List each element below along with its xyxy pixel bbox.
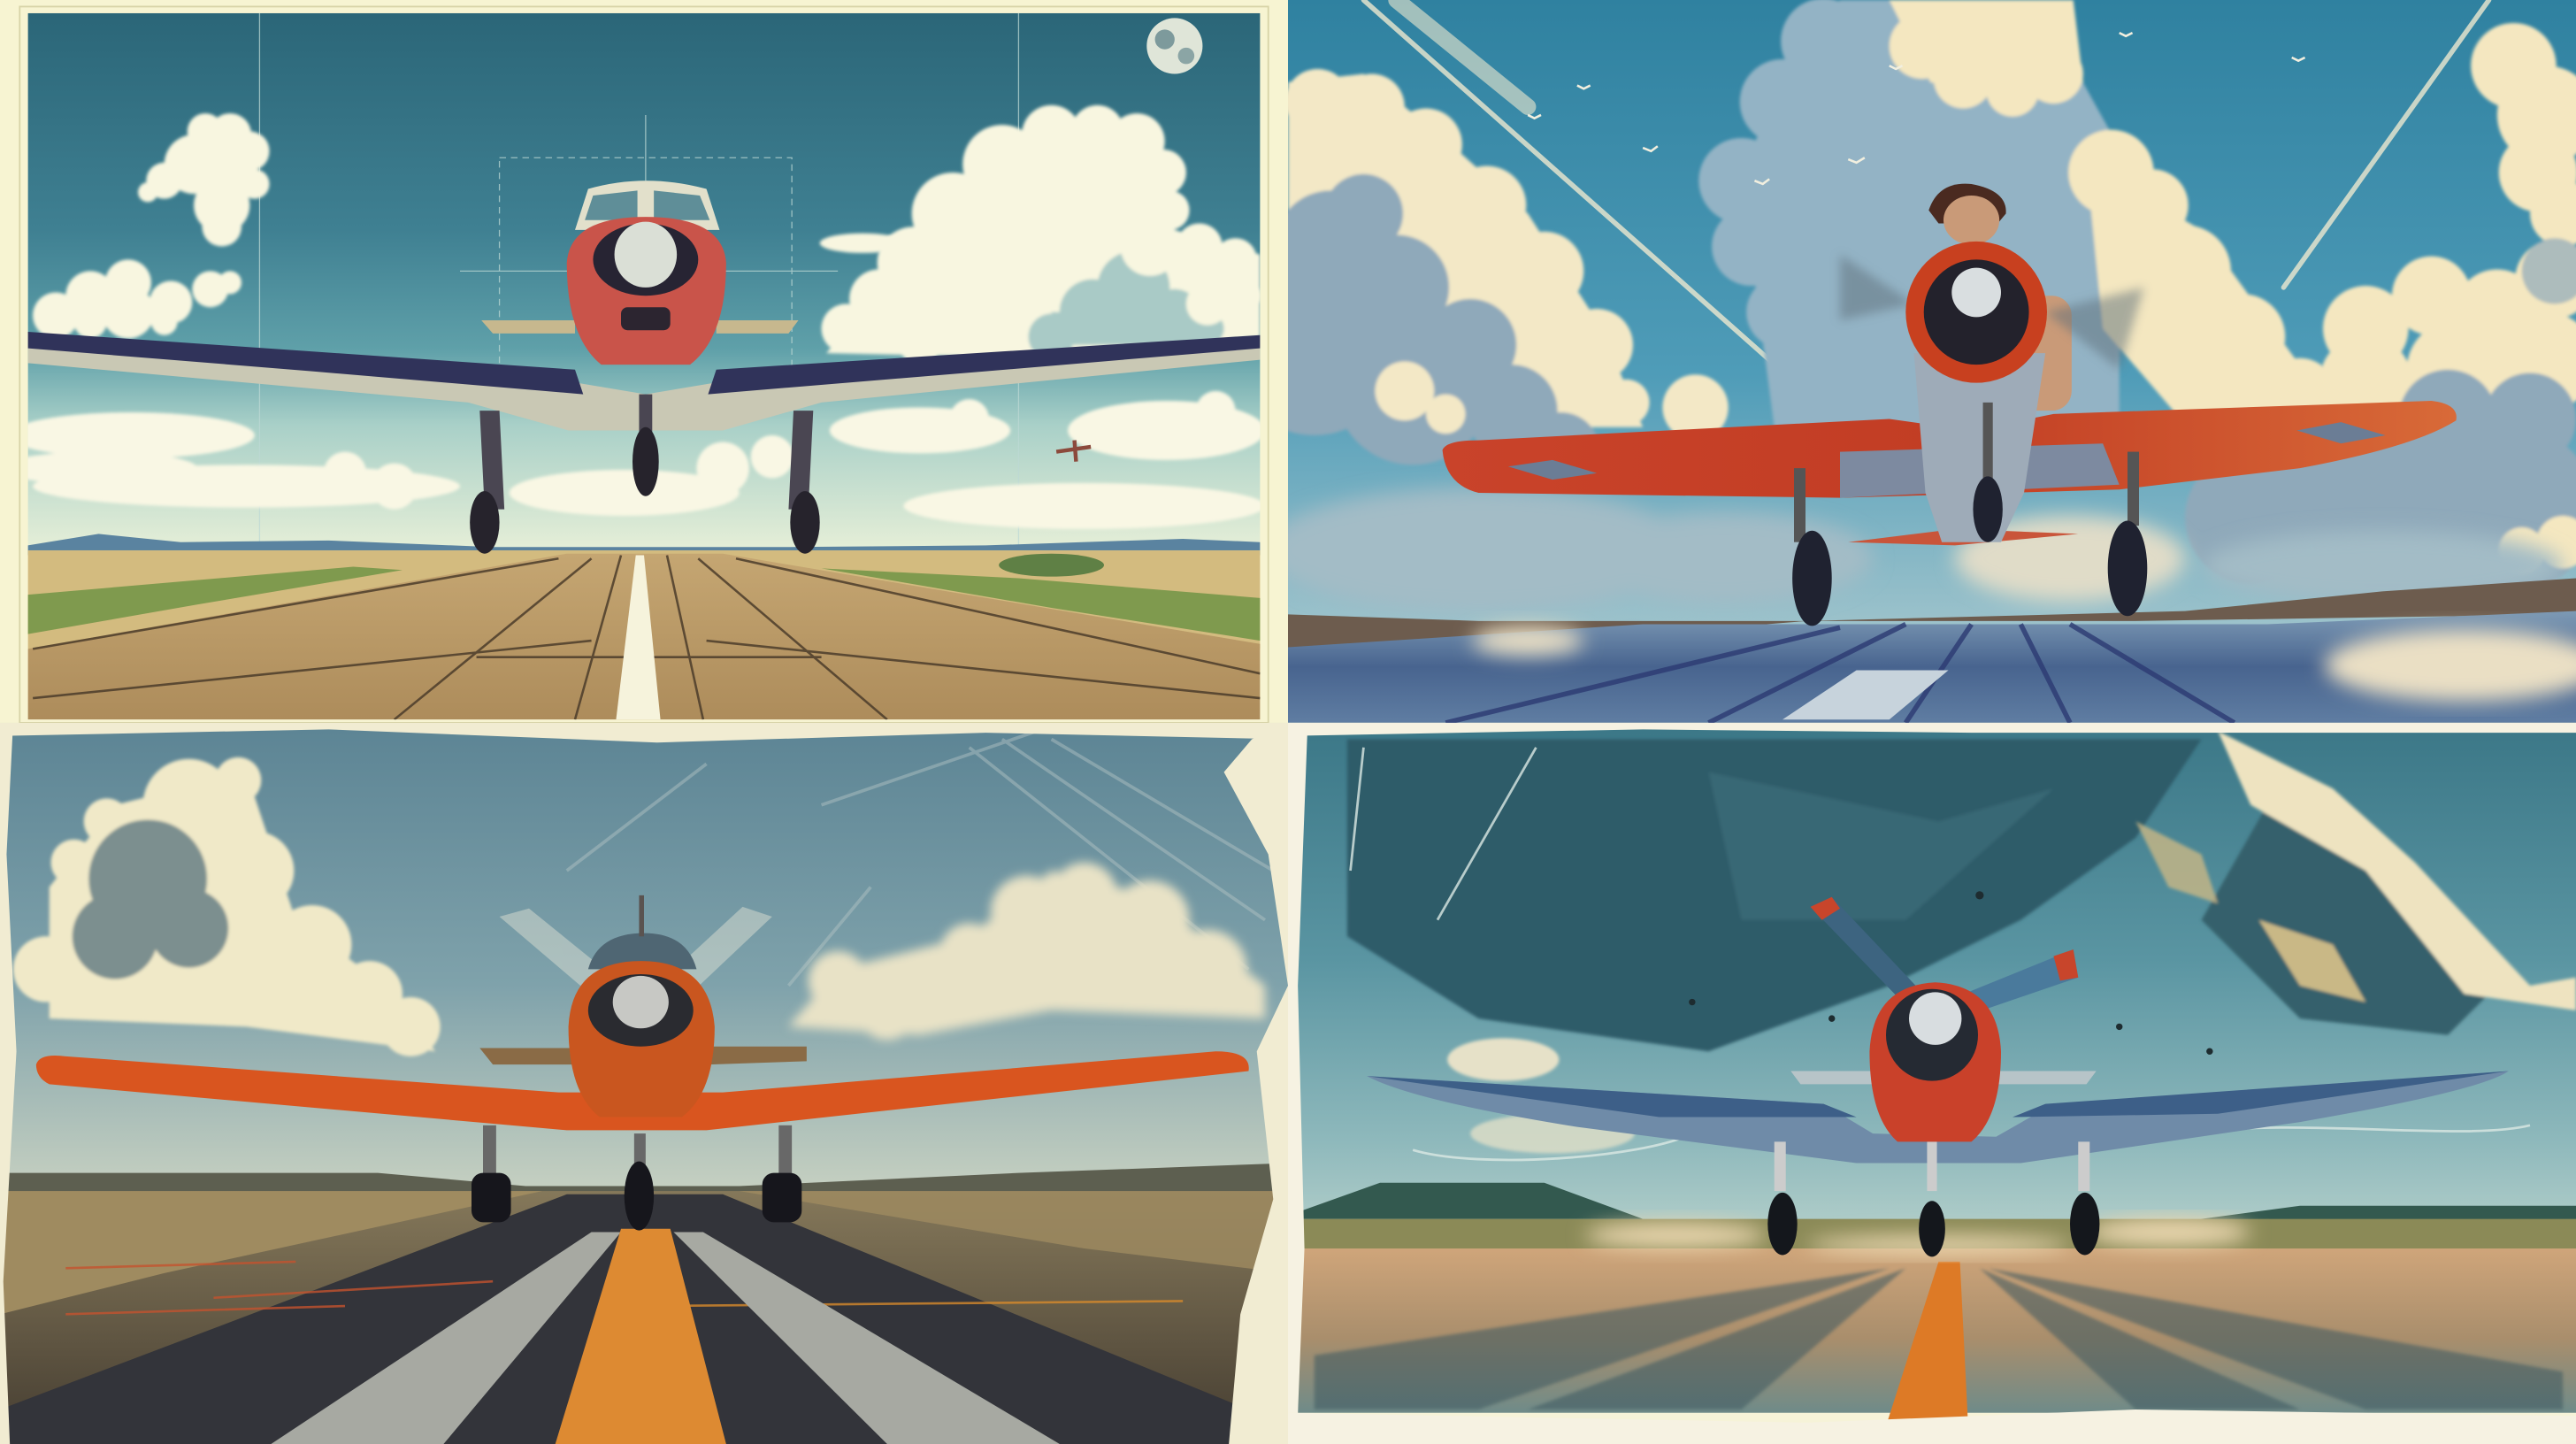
blueprint guide lines (258, 13, 1019, 545)
spinner (1951, 268, 2001, 317)
right storm cloud (2135, 731, 2576, 1035)
landing gear (470, 395, 820, 554)
spray (1472, 626, 2576, 702)
ground (0, 1191, 1288, 1444)
landing gear (1767, 1141, 2099, 1256)
fuselage (1869, 982, 2001, 1141)
panel: red plane with blue wings and dark storm sky (1288, 723, 2576, 1444)
fuselage (569, 961, 715, 1118)
contrails (1363, 0, 2489, 386)
wet runway (1288, 611, 2576, 723)
intake (593, 224, 698, 296)
horizon clouds (0, 391, 1265, 529)
grass (28, 554, 1260, 641)
cockpit (575, 180, 719, 230)
far treeline (0, 1164, 1288, 1196)
paint edges (1288, 723, 2576, 1444)
spinner (615, 222, 677, 288)
runway brush streaks (1315, 1268, 2563, 1409)
centre line (616, 556, 661, 719)
tailplane (479, 1047, 807, 1064)
left cloud mass (1288, 66, 1730, 465)
moon (1146, 18, 1202, 74)
plane: red with blue-grey wings (1367, 897, 2509, 1256)
white paint scratches (1351, 748, 2530, 1160)
left ground streaks (65, 1262, 1183, 1314)
fuselage (567, 217, 726, 365)
landing gear (472, 1125, 801, 1231)
tailplane (1848, 529, 2078, 545)
sky (0, 723, 1288, 1199)
small left clouds (33, 113, 905, 338)
tailplane (1790, 1071, 2097, 1084)
sky (1288, 0, 2576, 625)
pale low cloud (1447, 1038, 1635, 1153)
propeller blur (1840, 255, 2144, 370)
right cloud (788, 863, 1265, 1040)
fuselage (1914, 353, 2045, 542)
birds (1528, 33, 2305, 184)
orange centre stripe (1886, 1262, 1968, 1426)
sky (1288, 723, 2576, 1248)
propeller blur (500, 907, 772, 1002)
wings (36, 1051, 1249, 1130)
spinner (1909, 992, 1961, 1045)
panel: orange plane on dark runway (0, 723, 1288, 1444)
pilot (1928, 184, 2072, 411)
wings (1443, 401, 2457, 498)
tailplane (481, 320, 799, 334)
canopy (588, 933, 696, 969)
far hills (28, 534, 1260, 556)
fields (28, 550, 1260, 649)
plane: red with pilot (1443, 184, 2457, 626)
distressed cream edges (0, 723, 1288, 1444)
far shoreline (1288, 579, 2576, 650)
left cloud (13, 757, 441, 1056)
panel: plane with pilot among clouds (1232, 0, 2576, 723)
grass strip (1288, 1219, 2576, 1255)
lower clouds (1265, 488, 2563, 613)
runway (0, 1194, 1288, 1444)
orange centre stripe (556, 1229, 726, 1444)
runway seams (33, 556, 1260, 719)
wings (1367, 1071, 2509, 1164)
engine (1905, 242, 2047, 383)
runway (28, 554, 1260, 719)
plane: orange (36, 895, 1249, 1231)
runway (1298, 1248, 2576, 1413)
propeller (1811, 897, 2078, 1018)
large right cloud (822, 105, 1261, 370)
panel: teal sky plane with cream frame (0, 0, 1288, 723)
wings (28, 332, 1260, 430)
dark speckles (1689, 891, 2213, 1055)
tan shoulders (0, 1191, 1288, 1314)
central cloud mass (1698, 0, 2336, 443)
pale runway patch (1782, 671, 1949, 719)
runway streaks (1445, 625, 2235, 723)
plane: red front view (28, 180, 1260, 554)
white stripes (271, 1232, 1060, 1444)
right cloud mass (2185, 23, 2576, 591)
intake (1886, 989, 1978, 1081)
spinner (613, 976, 669, 1028)
dust burst (1585, 1217, 2250, 1255)
landing gear (1792, 403, 2147, 626)
small distant plane (1056, 441, 1091, 462)
sky (28, 13, 1260, 556)
intake (588, 974, 694, 1047)
dark storm cloud (1347, 739, 2202, 1051)
sky brush rays (567, 726, 1273, 986)
treeline (1288, 1183, 2576, 1229)
